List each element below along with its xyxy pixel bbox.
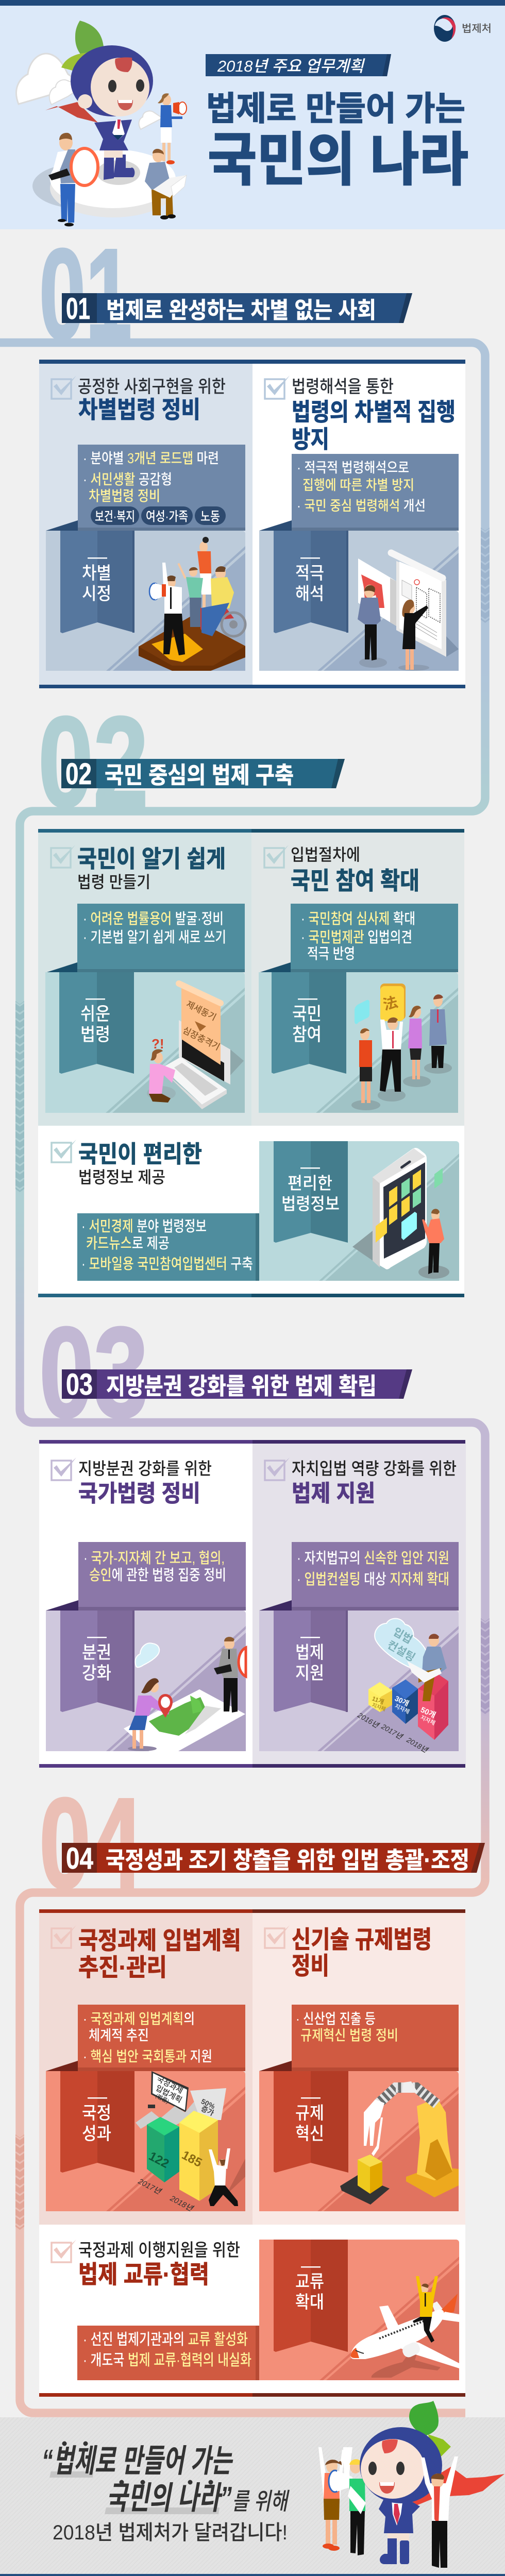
illustration: decentralisation map: 강화: [82, 1664, 111, 1683]
microchip: [340, 2155, 390, 2205]
illustration: robot arm: 규제: [295, 2104, 324, 2123]
section 2 heading: 02: [65, 757, 92, 791]
right checkbox icon and heading: 방지: [292, 426, 329, 453]
illustration: airplane: [259, 2240, 459, 2380]
heading: easy to understand: 법령 만들기: [77, 873, 150, 891]
plan sign: 국정과제: [155, 2075, 184, 2095]
info box: legal exchange: [77, 2326, 259, 2380]
left checkbox icon and heading: 공정한 사회구현을 위한: [78, 377, 226, 397]
illustration: easy law: [45, 972, 245, 1113]
right checkbox icon and heading: 법령의 차별적 집행: [292, 398, 456, 426]
left info box: 차별법령 정비: [89, 488, 160, 504]
illustration: consulting bar chart: 지원: [295, 1664, 324, 1683]
right checkbox icon and heading: 법령해석을 통한: [292, 377, 394, 397]
heading: national tasks: [52, 1925, 241, 1981]
mascot character: [45, 21, 153, 180]
right info box: [259, 454, 459, 531]
bar chart: 11개: [371, 1695, 385, 1706]
footer section: [0, 2401, 505, 2576]
year labels: [136, 2177, 195, 2214]
person in wheelchair: [200, 566, 245, 636]
man with magnifier: [214, 1637, 246, 1713]
info box: law information: [77, 1213, 259, 1281]
left illustration: correcting discrimination: [46, 531, 245, 671]
big section numbers: 01: [39, 222, 132, 366]
emphasis dots: [62, 2441, 213, 2484]
logo: ministry of government legislation: [434, 15, 492, 42]
rising zigzag arrow: 증가: [200, 2104, 215, 2117]
section 3 heading: 03: [66, 1368, 93, 1401]
robot base and tower: [406, 2098, 459, 2197]
heading: national laws: 지방분권 강화를 위한: [78, 1459, 212, 1478]
illustration: easy law: 법령: [80, 1025, 110, 1045]
bar chart: 지자체: [371, 1702, 386, 1713]
heading: convenient law information: [52, 1140, 202, 1187]
closing message: 국민의 나라”: [106, 2481, 232, 2516]
closing message: 2018년 법제처가 달려갑니다!: [53, 2521, 288, 2544]
heading: new technology: [265, 1925, 432, 1979]
mascot character: [360, 2401, 504, 2564]
illustration: robot arm: 혁신: [295, 2124, 324, 2144]
bar chart: [368, 1673, 448, 1740]
illustration: decentralisation map: 분권: [82, 1643, 111, 1663]
section 1 heading: 법제로 완성하는 차별 없는 사회: [106, 298, 376, 323]
heading: legal exchange: [52, 2240, 240, 2289]
left illustration: correcting discrimination: 차별: [82, 564, 111, 583]
year labels: 2018년: [405, 1735, 430, 1755]
big section numbers: 03: [39, 1300, 148, 1444]
rising zigzag arrow: 50%: [200, 2097, 216, 2111]
brown platform: [139, 617, 245, 671]
info box: national laws: · 국가-지자체 간 보고, 협의,: [83, 1550, 225, 1567]
year labels: 2018년: [168, 2194, 195, 2214]
left checkbox icon and heading: [52, 376, 226, 423]
heading: convenient law information: 법령정보 제공: [78, 1168, 165, 1187]
illustration: consulting bar chart: 법제: [295, 1643, 324, 1663]
bar chart: bills: [146, 2111, 218, 2201]
panel: section 2: [38, 829, 464, 1297]
illustration: national performance chart: 성과: [82, 2124, 111, 2144]
illustration: public participation: [259, 972, 458, 1113]
illustration: smartphone: 법령정보: [281, 1194, 340, 1213]
illustration: public participation: 참여: [292, 1025, 322, 1045]
main title: [206, 90, 468, 192]
info box: law information: · 서민경제 분야 법령정보: [81, 1218, 207, 1235]
pills: policy areas: 노동: [200, 510, 220, 524]
law sign and man: [378, 984, 406, 1101]
plane shadow: [372, 2348, 441, 2378]
heading: local legislation support: 법제 지원: [292, 1480, 375, 1506]
info box: local legislation: [259, 1542, 459, 1611]
woman with pin: [128, 1678, 173, 1751]
heading: easy to understand: 국민이 알기 쉽게: [77, 845, 226, 872]
heading: local legislation support: [265, 1458, 457, 1506]
bar chart: bills: 185: [179, 2148, 204, 2170]
info box: local legislation: · 자치법규의 신속한 입안 지원: [297, 1550, 449, 1567]
robot arm segments: [364, 2081, 437, 2156]
panel: section 3: [39, 1440, 466, 1768]
illustration: smartphone: [259, 1141, 459, 1281]
map: [124, 1689, 245, 1751]
main title: 법제로 만들어 가는: [206, 90, 465, 127]
woman left: [351, 1028, 380, 1110]
bar chart: 30개: [394, 1694, 410, 1708]
info box: national laws: [46, 1542, 246, 1611]
plan sign: 입법계획: [154, 2084, 183, 2105]
airplane: [350, 2294, 459, 2368]
main title: 국민의 나라: [208, 128, 468, 192]
surprised person: ?!: [152, 1036, 164, 1052]
right illustration: active interpretation: 해석: [295, 584, 324, 604]
cloud: [135, 1643, 159, 1667]
speech bubble: [355, 1000, 369, 1024]
year labels: 2017년: [380, 1722, 405, 1741]
info box: easy law: · 기본법 알기 쉽게 새로 쓰기: [83, 929, 226, 946]
big section numbers: [38, 222, 148, 1915]
section 4 heading: [62, 1842, 485, 1875]
laptop with scroll: 제세동기: [184, 999, 218, 1023]
info box: national tasks: · 국정과제 입법계획의: [83, 2011, 195, 2027]
left info box: · 분야별 3개년 로드맵 마련: [83, 450, 219, 466]
illustration: consulting bar chart: [259, 1611, 459, 1755]
big section numbers: 02: [38, 690, 148, 834]
cloud: legislative consulting: 입법: [391, 1626, 414, 1646]
left info box: · 서민생활 공감형: [83, 471, 172, 487]
info box: public participation: · 국민법제관 입법의견: [301, 929, 412, 946]
info box: law information: 카드뉴스로 제공: [86, 1235, 170, 1252]
info box: local legislation: · 입법컨설팅 대상 지자체 확대: [297, 1571, 449, 1588]
person: man with green vest: [343, 2447, 366, 2555]
section 2 heading: 국민 중심의 법제 구축: [105, 762, 294, 788]
heading: national tasks: 추진·관리: [78, 1954, 167, 1981]
section 3 heading: [62, 1368, 412, 1401]
woman standing: [197, 537, 211, 609]
info box: national tasks: [46, 2005, 245, 2071]
illustration: decentralisation map: [46, 1611, 246, 1751]
connector line: [0, 343, 490, 2413]
heading: easy to understand: [51, 845, 226, 891]
info box: legal exchange: · 개도국 법제 교류·협력의 내실화: [83, 2352, 251, 2369]
law sign and man: 法: [381, 994, 399, 1013]
man pointing: [418, 1209, 449, 1279]
laptop with scroll: 심장충격기: [181, 1025, 222, 1052]
right illustration: active interpretation: [259, 531, 459, 671]
section 4 heading: 국정성과 조기 창출을 위한 입법 총괄·조정: [106, 1847, 469, 1873]
heading: public participation: 입법절차에: [291, 845, 360, 864]
section 3 heading: 지방분권 강화를 위한 법제 확립: [106, 1373, 377, 1399]
pills: policy areas: 보건·복지: [95, 510, 135, 524]
year labels: 2016년: [356, 1710, 381, 1730]
heading: new technology: 정비: [292, 1952, 329, 1979]
section 1 heading: 01: [66, 292, 90, 326]
info box: public participation: [260, 904, 458, 972]
big section numbers: 04: [39, 1771, 142, 1915]
bar chart: 지자체: [394, 1703, 411, 1716]
illustration: easy law: 쉬운: [80, 1004, 110, 1024]
closing message: [42, 2444, 290, 2544]
info box: public participation: 적극 반영: [307, 945, 355, 962]
illustration: national performance chart: 국정: [82, 2104, 111, 2123]
law book: [358, 558, 396, 626]
excited person: [209, 2148, 245, 2206]
man riding plane: [413, 2276, 438, 2343]
year labels: [356, 1710, 430, 1755]
info box: new technology: · 신산업 진출 등: [296, 2011, 376, 2027]
plan sign: [148, 2071, 189, 2112]
man viewing: [358, 585, 387, 668]
woman writing: [398, 600, 429, 671]
surprised person: [147, 1036, 176, 1103]
info box: law information: · 모바일용 국민참여입법센터 구축: [81, 1256, 253, 1273]
person: man with raised arms: [421, 2456, 458, 2568]
info box: easy law: [47, 904, 245, 972]
cloud: legislative consulting: 컨설팅: [385, 1639, 417, 1664]
info box: national tasks: 체계적 추진: [89, 2027, 149, 2043]
info box: national tasks: · 핵심 법안 국회통과 지원: [83, 2048, 212, 2064]
heading: national tasks: 국정과제 입법계획: [78, 1927, 241, 1954]
closing message: “법제로 만들어 가는: [42, 2444, 233, 2479]
platform: [32, 149, 176, 217]
person: seated man with laptop: [145, 149, 187, 219]
large paper: [391, 553, 459, 657]
highlight bars: [49, 2471, 220, 2514]
heading: new technology: 신기술 규제법령: [292, 1926, 432, 1953]
rising zigzag arrow: [136, 2088, 226, 2134]
woman middle: [403, 1006, 431, 1087]
info box: new technology: 규제혁신 법령 정비: [300, 2027, 398, 2043]
info box: national laws: 승인에 관한 법령 집중 정비: [89, 1567, 226, 1584]
bar chart: 50개: [419, 1705, 437, 1720]
phone: [352, 1148, 443, 1269]
info box: public participation: · 국민참여 심사제 확대: [301, 910, 415, 927]
heading: public participation: [264, 845, 419, 894]
heading: public participation: 국민 참여 확대: [291, 867, 419, 894]
heading: national laws: 국가법령 정비: [78, 1480, 200, 1506]
left illustration: correcting discrimination: 시정: [82, 584, 111, 604]
illustration: public participation: 국민: [292, 1004, 322, 1024]
heading: legal exchange: 법제 교류·협력: [78, 2261, 209, 2289]
year labels: 2017년: [136, 2177, 163, 2197]
heading: national laws: [52, 1458, 212, 1506]
right info box: 집행에 따른 차별 방지: [302, 478, 414, 493]
pills: policy areas: 여성·가족: [146, 510, 188, 524]
person: man with magnifying glass: [48, 133, 98, 227]
hero section: [0, 0, 505, 229]
illustration: national performance chart: [46, 2071, 245, 2214]
info box: easy law: · 어려운 법률용어 발굴·정비: [83, 910, 224, 927]
right checkbox icon and heading: [265, 376, 456, 453]
child: [177, 563, 203, 627]
right illustration: active interpretation: 적극: [295, 564, 324, 583]
man with megaphone: [149, 563, 185, 655]
closing message: 를 위해: [232, 2488, 290, 2515]
section 2 heading: [61, 757, 345, 791]
panel: section 4: [39, 1909, 465, 2397]
illustration: smartphone: 편리한: [288, 1174, 332, 1193]
bar chart: 지자체: [419, 1714, 436, 1727]
top banner label: [206, 54, 391, 76]
bar chart: bills: 122: [146, 2149, 171, 2171]
clouds: [16, 54, 162, 129]
pills: policy areas: [91, 506, 226, 525]
heading: local legislation support: 자치입법 역량 강화를 위한: [292, 1459, 457, 1478]
illustration: airplane: 교류: [295, 2272, 324, 2292]
man right: [424, 994, 452, 1074]
heading: convenient law information: 국민이 편리한: [78, 1141, 202, 1167]
section 4 heading: 04: [66, 1842, 93, 1875]
panel: section 1: [39, 360, 465, 688]
man on laptop: [407, 1634, 447, 1701]
top banner label: 2018년 주요 업무계획: [217, 57, 365, 75]
info box: new technology: [259, 2005, 459, 2071]
info box: legal exchange: · 선진 법제기관과의 교류 활성화: [83, 2331, 248, 2348]
left checkbox icon and heading: 차별법령 정비: [78, 396, 200, 423]
illustration: robot arm: [259, 2071, 459, 2211]
right info box: · 적극적 법령해석으로: [297, 460, 409, 476]
plan sign: (법률): [155, 2092, 170, 2105]
heading: legal exchange: 국정과제 이행지원을 위한: [78, 2241, 240, 2260]
person: woman with megaphone: [158, 93, 187, 164]
right info box: · 국민 중심 법령해석 개선: [297, 498, 426, 514]
left info box: [46, 445, 245, 531]
cloud: legislative consulting: [375, 1619, 429, 1671]
logo: ministry of government legislation: 법제처: [462, 23, 492, 35]
illustration: airplane: 확대: [295, 2293, 324, 2312]
section 1 heading: [62, 292, 412, 326]
person: woman with megaphone: [318, 2447, 352, 2551]
laptop with scroll: [162, 984, 244, 1109]
